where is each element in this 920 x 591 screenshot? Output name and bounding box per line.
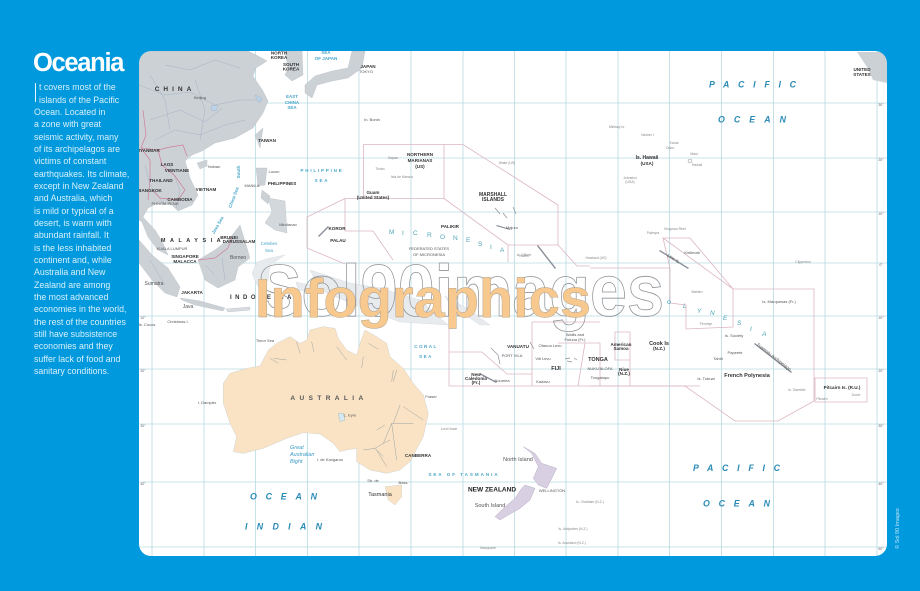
- graticule degree labels: 40°: [140, 482, 146, 486]
- place labels: Pacific islands: Line Is.: [666, 253, 681, 265]
- place labels: Pacific islands: Is. Hawaii: [636, 155, 659, 161]
- country and place labels: Asia: KOROR: [328, 226, 346, 231]
- left panel: title and description: [33, 48, 129, 376]
- place labels: Pacific islands: (USA): [641, 161, 654, 166]
- place labels: Pacific islands: Malden: [691, 290, 703, 294]
- graticule degree labels: 20°: [878, 369, 884, 373]
- description text: desert, is warm with: [34, 218, 112, 228]
- place labels: Pacific islands: OF MICRONESIA: [413, 252, 445, 257]
- country and place labels: Asia: JAKARTA: [181, 290, 203, 295]
- ocean names: OCEAN: [703, 498, 771, 508]
- place labels: Australia and New Zealand: Macquarie: [480, 546, 496, 550]
- place labels: Pacific islands: Pitcairn: [816, 397, 828, 401]
- place labels: Pacific islands: Clipperton: [795, 260, 811, 264]
- sea names: Java Sea: [211, 215, 225, 235]
- graticule degree labels: 10°: [878, 212, 884, 216]
- sea names: South: [236, 165, 241, 178]
- graticule degree labels: 30°: [878, 424, 884, 428]
- place labels: Pacific islands: NORTHERN: [407, 152, 434, 157]
- place labels: Pacific islands: Ofanua Levu: [539, 343, 561, 348]
- place labels: Pacific islands: PALIKIR: [441, 224, 460, 229]
- place labels: Pacific islands: Isla de Marcus: [391, 175, 413, 179]
- ocean names: PACIFIC: [693, 463, 781, 473]
- place labels: Pacific islands: Kingman Reef: [664, 227, 686, 231]
- place labels: Pacific islands: Ducie: [852, 393, 860, 397]
- place labels: Pacific islands: Tinian: [375, 167, 385, 171]
- graticule degree labels: [140, 103, 884, 551]
- maritime boundaries: [307, 144, 867, 421]
- place labels: Australia and New Zealand: Timor Sea: [256, 338, 275, 343]
- description text: abundant rainfall. It: [34, 230, 109, 240]
- place labels: Australia and New Zealand: WELLINGTON: [539, 488, 565, 493]
- place labels: Pacific islands: Kiritimati: [684, 250, 700, 255]
- ocean names: [245, 80, 797, 532]
- country and place labels: Asia: SINGAPORE: [171, 254, 199, 259]
- description text: islands of the Pacific: [39, 94, 119, 104]
- description text: [34, 82, 129, 376]
- country and place labels: Asia: DARUSSALAM: [223, 239, 256, 244]
- place labels: Pacific islands: Johnston: [623, 176, 637, 180]
- country and place labels: Asia: KOREA: [283, 66, 300, 72]
- place labels: Pacific islands: (United States): [357, 195, 390, 200]
- country and place labels: Asia: MANILA: [245, 183, 260, 188]
- place labels: Pacific islands: MARIANAS: [408, 158, 432, 163]
- description text: sanitary conditions.: [34, 366, 109, 376]
- sea names: EAST: [286, 94, 298, 99]
- sea names: SEA: [315, 178, 329, 183]
- country and place labels: Asia: PALAU: [330, 238, 346, 243]
- place labels: Pacific islands: Palmyra: [647, 231, 659, 235]
- country and place labels: Asia: BANGKOK: [138, 188, 163, 193]
- sea names: [211, 50, 500, 477]
- graticule degree labels: 0°: [879, 263, 883, 267]
- sea names: SEA: [287, 105, 297, 110]
- graticule degree labels: 30°: [878, 103, 884, 107]
- place labels: Pacific islands: Wake (US): [499, 161, 515, 165]
- place labels: Pacific islands: [357, 67, 871, 401]
- ocean names: PACIFIC: [709, 80, 797, 90]
- description text: is mild or typical of a: [34, 206, 114, 216]
- description text: of its archipelagos are: [34, 144, 120, 154]
- place labels: Pacific islands: Samoa: [613, 346, 629, 351]
- place labels: Pacific islands: Hawaii: [692, 163, 702, 167]
- place labels: Pacific islands: Is. Society: [725, 333, 743, 338]
- place labels: Pacific islands: Tongatapu: [591, 375, 609, 380]
- country and place labels: Asia: Mindanao: [279, 222, 298, 227]
- place labels: Pacific islands: French Polynesia: [724, 373, 771, 379]
- country and place labels: Asia: Hainan: [208, 164, 220, 169]
- country and place labels: Asia: Is. Cocos: [139, 322, 155, 327]
- place labels: Pacific islands: Is. Marquesas (Fr.): [762, 299, 796, 304]
- country and place labels: Asia: KUALA LUMPUR: [157, 246, 188, 251]
- country and place labels: Asia: NORTH: [271, 50, 288, 56]
- place labels: Pacific islands: Futuna (Fr.): [565, 337, 586, 342]
- description text: Ocean. Located in: [34, 107, 105, 117]
- country and place labels: Asia: Beijing: [194, 95, 206, 100]
- country and place labels: Asia: VIETNAM: [196, 187, 217, 192]
- place labels: Australia and New Zealand: Is. Antipodes (N.Z.): [558, 527, 588, 531]
- country and place labels: Asia: Christmas I.: [167, 319, 189, 324]
- country and place labels: Asia: CHINA: [155, 86, 195, 93]
- place labels: Australia and New Zealand: Is. Auckland (N.Z.): [558, 541, 586, 545]
- country and place labels: Asia: BRUNEI: [220, 235, 238, 240]
- sea names: SEA OF TASMANIA: [428, 472, 500, 477]
- sea names: PHILIPPINE: [300, 168, 344, 173]
- description text: t covers most of the: [39, 82, 116, 92]
- place labels: Pacific islands: ISLANDS: [482, 197, 505, 203]
- place labels: Australia and New Zealand: I. Dampier: [198, 400, 217, 405]
- sea names: Bight: [290, 459, 303, 465]
- ocean names: INDIAN: [245, 522, 323, 532]
- place labels: Pacific islands: Guam: [366, 190, 380, 195]
- place labels: Pacific islands: Kadavu: [536, 379, 550, 384]
- place labels: Pacific islands: Howland (US): [585, 256, 607, 260]
- watermark: orange Infographics: Infographics: [255, 267, 591, 329]
- graticule degree labels: 20°: [878, 158, 884, 162]
- country and place labels: Asia: MYANMAR: [136, 148, 160, 153]
- description text: suffer lack of food and: [34, 354, 120, 364]
- description text: victims of constant: [34, 156, 106, 166]
- place labels: Pacific islands: Viti Levu: [535, 356, 551, 361]
- country and place labels: Asia: JAPAN: [360, 64, 376, 69]
- copyright note: © Sol 90 Images: [894, 508, 901, 549]
- place labels: Pacific islands: Nauru: [519, 254, 529, 258]
- place labels: Pacific islands: Necker I.: [641, 133, 655, 137]
- country and place labels: Asia: In. Bonin: [364, 117, 380, 122]
- regional lettering: Micronesia and Polynesia: LYNESIA: [683, 303, 766, 338]
- description text: economies in the world,: [34, 304, 126, 314]
- place labels: Australia and New Zealand: North Island: [503, 457, 533, 463]
- place labels: Australia and New Zealand: AUSTRALIA: [290, 395, 368, 402]
- graticule degree labels: 50°: [878, 547, 884, 551]
- place labels: Pacific islands: Saipan: [388, 156, 398, 160]
- place labels: Pacific islands: Niue: [619, 367, 629, 372]
- place labels: Australia and New Zealand: I. de Kangaroo: [317, 457, 344, 462]
- place labels: Pacific islands: Is. Gilbert: [517, 253, 531, 257]
- place labels: Australia and New Zealand: Lord Howe: [441, 427, 457, 431]
- place labels: Pacific islands: Is. Gambier: [788, 388, 807, 392]
- country and place labels: Asia: PHNOM PENH: [151, 201, 179, 206]
- place labels: Australia and New Zealand: Tasmania: [368, 492, 393, 498]
- description text: Australia and New: [34, 267, 105, 277]
- place labels: Pacific islands: Oahu: [666, 146, 674, 150]
- country and place labels: Asia: VIENTIANE: [165, 168, 189, 173]
- description text: a zone with great: [34, 119, 101, 129]
- ocean names: OCEAN: [250, 492, 318, 502]
- watermark: outlined Sol90images: Sol90images: [257, 251, 664, 332]
- country and place labels: Asia: PHILIPPINES: [268, 181, 296, 186]
- place labels: Australia and New Zealand: L. Eyre: [344, 412, 357, 418]
- country and place labels: Asia: THAILAND: [149, 178, 173, 183]
- place labels: Pacific islands: Midway Is.: [609, 125, 625, 129]
- ocean names: OCEAN: [718, 114, 787, 124]
- west coast of the United States: [857, 52, 887, 83]
- place labels: Australia and New Zealand: Is. Chatham (N.Z.): [576, 500, 604, 504]
- place labels: Pacific islands: Maui: [690, 152, 698, 156]
- sea names: Sea: [265, 248, 273, 253]
- sea names: CORAL: [414, 344, 438, 349]
- sea names: China Sea: [228, 186, 240, 209]
- place labels: Pacific islands: FIJI: [551, 366, 561, 372]
- regional lettering: Micronesia and Polynesia: MICRONESIA: [389, 229, 505, 254]
- country and place labels: Asia: Borneo: [230, 255, 246, 261]
- place labels: Pacific islands: NUKU'ALOFA: [588, 366, 613, 371]
- description text: Zealand are among: [34, 280, 110, 290]
- sea names: CHINA: [285, 100, 300, 105]
- graticule degree labels: 20°: [140, 369, 146, 373]
- Pacific island groups: [318, 159, 792, 383]
- place labels: Pacific islands: Tuamotu Archipelago: [756, 342, 793, 372]
- place labels: Pacific islands: Penrhyn: [700, 322, 712, 326]
- description text: except in New Zealand: [34, 181, 124, 191]
- title: Oceania: [33, 48, 123, 76]
- place labels: Pacific islands: Wallis and: [566, 332, 584, 337]
- description text: economies and they: [34, 341, 113, 351]
- place labels: Pacific islands: Caledonia: [465, 376, 487, 381]
- place labels: Pacific islands: (N.Z.): [653, 346, 665, 351]
- place labels: Pacific islands: Majuro: [506, 225, 519, 230]
- place labels: Australia and New Zealand: [198, 338, 604, 550]
- description text: continent and, while: [34, 255, 112, 265]
- land: East and Southeast Asia: [139, 51, 365, 312]
- country and place labels: Asia: LAOS: [161, 162, 173, 167]
- country and place labels: Asia: KOREA: [271, 55, 288, 60]
- place labels: Pacific islands: (US): [415, 164, 425, 169]
- place labels: Pacific islands: New: [471, 372, 481, 377]
- map of Oceania: [139, 51, 900, 556]
- New Zealand: [495, 447, 557, 520]
- sea names: Great: [290, 445, 304, 451]
- country and place labels: Asia: INDONESIA: [230, 295, 295, 301]
- national borders of Southeast Asia: [141, 110, 232, 260]
- description text: still have subsistence: [34, 329, 117, 339]
- description text: earthquakes. Its climate,: [34, 168, 129, 178]
- sea names: OF JAPAN: [315, 56, 337, 61]
- sea names: Celebes: [261, 241, 278, 246]
- place labels: Australia and New Zealand: CANBERRA: [405, 453, 432, 458]
- description text: seismic activity, many: [34, 132, 118, 142]
- graticule degree labels: 10°: [878, 316, 884, 320]
- sea names: SEA: [321, 50, 331, 55]
- place labels: Pacific islands: FEDERATED STATES: [409, 246, 449, 251]
- place labels: Pacific islands: Noumea: [494, 378, 510, 383]
- description text: and Australia, which: [34, 193, 112, 203]
- description text: the rest of the countries: [34, 316, 126, 326]
- place labels: Pacific islands: Is. Tubuai: [697, 376, 715, 381]
- country and place labels: Asia: [136, 50, 380, 327]
- description text: the most advanced: [34, 292, 108, 302]
- description text: is the less inhabited: [34, 242, 111, 252]
- place labels: Pacific islands: (N.Z.): [618, 371, 630, 376]
- sea names: Australian: [289, 452, 314, 458]
- regional lettering: Micronesia and Polynesia: [389, 229, 766, 338]
- place labels: Pacific islands: American: [611, 342, 632, 347]
- Australia and Tasmania: [223, 327, 428, 505]
- place labels: Pacific islands: STATES: [853, 72, 871, 77]
- country and place labels: Asia: TOKYO: [359, 69, 373, 74]
- country and place labels: Asia: Java: [183, 304, 193, 310]
- place labels: Australia and New Zealand: NEW ZEALAND: [468, 486, 516, 494]
- place labels: Pacific islands: Tahiti: [713, 356, 723, 361]
- place labels: Australia and New Zealand: South Island: [475, 503, 505, 509]
- place labels: Pacific islands: Kauai: [670, 141, 679, 145]
- land: eastern Indonesia and New Guinea: [252, 255, 490, 325]
- graticule degree labels: 30°: [140, 424, 146, 428]
- place labels: Pacific islands: Cook Is: [649, 341, 669, 347]
- country and place labels: Asia: CAMBODIA: [167, 197, 193, 202]
- graticule degree labels: 10°: [140, 316, 146, 320]
- place labels: Australia and New Zealand: Fraser: [425, 394, 437, 399]
- place labels: Pacific islands: Pitcairn Is. (R.U.): [824, 385, 861, 390]
- place labels: Australia and New Zealand: Bass: [399, 480, 407, 485]
- place labels: Pacific islands: Papeete: [728, 350, 743, 355]
- country and place labels: Asia: Luzon: [269, 169, 279, 174]
- place labels: Pacific islands: MARSHALL: [479, 192, 507, 198]
- place labels: Pacific islands: (USA): [625, 180, 635, 184]
- place labels: Pacific islands: (Fr.): [472, 380, 481, 385]
- sea names: SEA: [419, 354, 433, 359]
- rivers and lakes of Asia: [139, 60, 262, 285]
- country and place labels: Asia: MALACCA: [173, 259, 197, 264]
- graticule degree labels: 40°: [878, 482, 884, 486]
- place labels: Pacific islands: UNITED: [853, 67, 871, 72]
- place labels: Pacific islands: VANUATU: [507, 344, 530, 349]
- country and place labels: Asia: TAIWAN: [258, 138, 277, 143]
- place labels: Pacific islands: TONGA: [588, 357, 608, 363]
- country and place labels: Asia: SOUTH: [283, 62, 300, 67]
- place labels: Pacific islands: PORT VILA: [502, 353, 523, 358]
- place labels: Australia and New Zealand: Str. de: [367, 478, 380, 483]
- country and place labels: Asia: Sumatra: [145, 281, 164, 287]
- country and place labels: Asia: MALAYSIA: [161, 238, 225, 244]
